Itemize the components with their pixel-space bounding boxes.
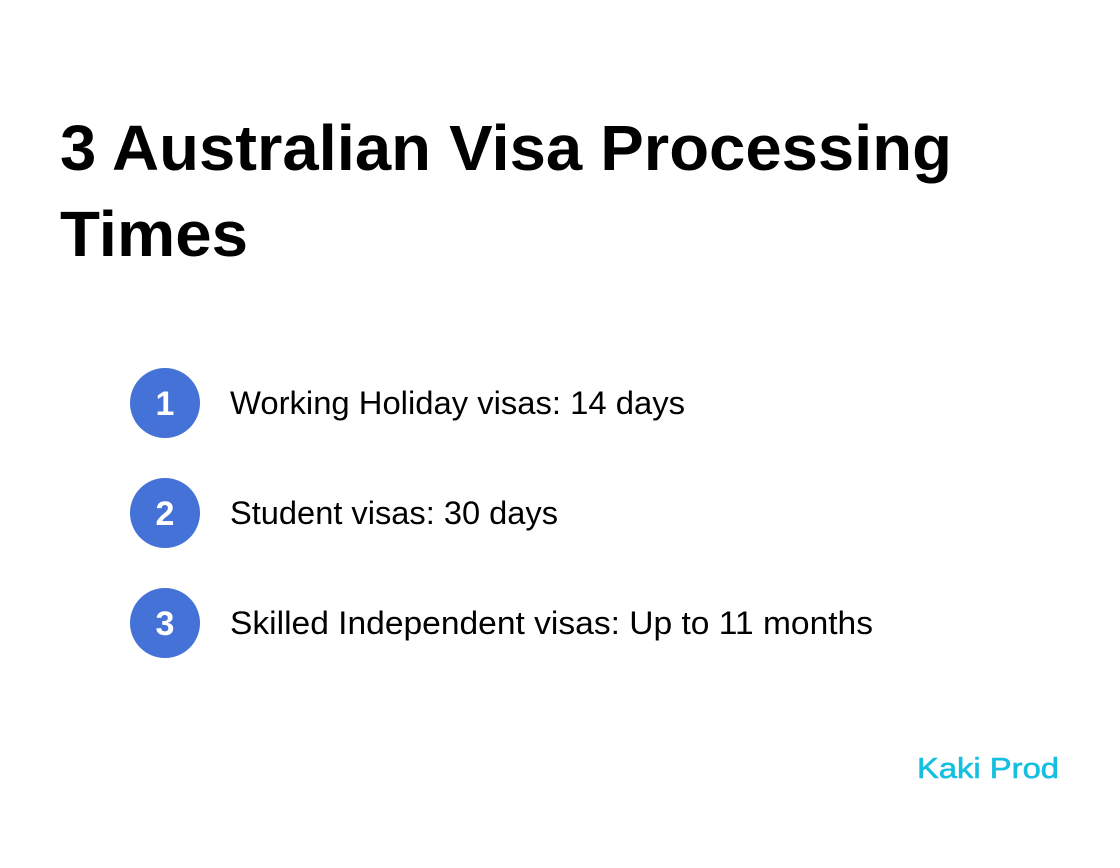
title: Times (60, 198, 248, 270)
badge 1: 1 (156, 385, 174, 423)
badge 3 (130, 588, 200, 658)
badge 1 (130, 368, 200, 438)
title (60, 112, 952, 270)
label 2: Student visas: 30 days (230, 495, 558, 531)
list item 1 (130, 368, 685, 438)
badge 2: 2 (156, 495, 174, 533)
badge 3: 3 (156, 605, 174, 643)
label 3: Skilled Independent visas: Up to 11 months (230, 605, 873, 641)
title: 3 Australian Visa Processing (60, 112, 952, 184)
list item 3 (130, 588, 873, 658)
logo: Kaki Prod: Kaki Prod (917, 753, 1059, 785)
list item 2 (130, 478, 558, 548)
badge 2 (130, 478, 200, 548)
label 1: Working Holiday visas: 14 days (230, 385, 685, 421)
